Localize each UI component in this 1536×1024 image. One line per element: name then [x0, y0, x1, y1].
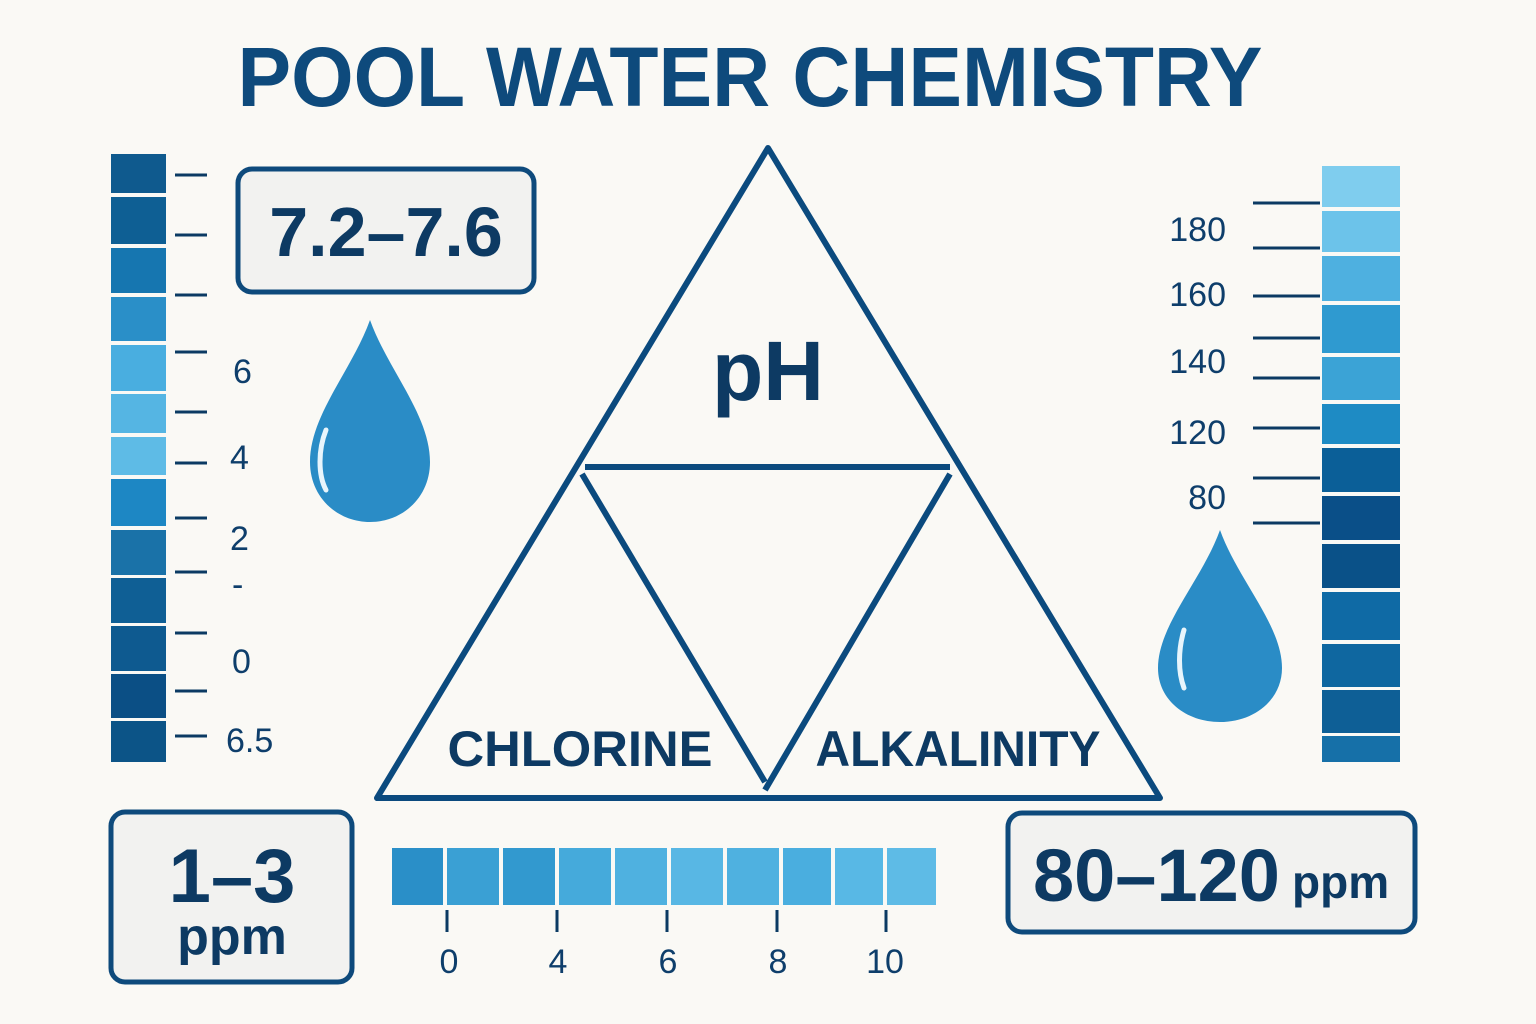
right scale ticks and labels — [1169, 203, 1320, 523]
left pH color strip — [111, 154, 166, 762]
right scale ticks and labels: 160 — [1169, 276, 1226, 314]
chlorine range box: ppm — [177, 908, 287, 966]
right scale ticks and labels: 180 — [1169, 211, 1226, 249]
triangle diagram — [377, 148, 1160, 798]
chlorine range box: 1–3 — [169, 834, 295, 919]
bottom scale ticks and labels: 8 — [769, 943, 787, 981]
label: alkalinity: ALKALINITY — [816, 721, 1100, 777]
left scale ticks and labels: 6.5 — [226, 722, 273, 760]
alkalinity range box — [1008, 813, 1415, 932]
title: POOL WATER CHEMISTRY — [238, 30, 1262, 124]
icon: right water drop — [1158, 530, 1282, 722]
bottom scale ticks and labels — [440, 910, 904, 981]
icon: left water drop — [310, 320, 430, 522]
bottom scale ticks and labels: 4 — [549, 943, 567, 981]
alkalinity range box: ppm — [1292, 856, 1389, 908]
left scale ticks and labels: 2 — [230, 520, 249, 558]
right scale ticks and labels: 80 — [1188, 479, 1226, 517]
alkalinity range box: 80–120 — [1033, 834, 1280, 917]
right scale ticks and labels: 140 — [1169, 343, 1226, 381]
left scale ticks and labels: - — [232, 566, 243, 604]
bottom scale ticks and labels: 6 — [659, 943, 677, 981]
bottom scale ticks and labels: 10 — [866, 943, 904, 981]
bottom chlorine color strip — [392, 848, 936, 905]
left scale ticks and labels: 0 — [232, 643, 251, 681]
right scale ticks and labels: 120 — [1169, 414, 1226, 452]
label: chlorine: CHLORINE — [448, 721, 712, 777]
left scale ticks and labels: 6 — [233, 353, 252, 391]
left scale ticks and labels: 4 — [230, 439, 249, 477]
left scale ticks and labels — [175, 175, 273, 760]
pH range box — [238, 169, 534, 292]
chlorine range box — [111, 812, 352, 982]
bottom scale ticks and labels: 0 — [440, 943, 458, 981]
right alkalinity color strip — [1322, 166, 1400, 762]
pH range box: 7.2–7.6 — [269, 193, 503, 271]
label: pH: pH — [712, 324, 824, 418]
